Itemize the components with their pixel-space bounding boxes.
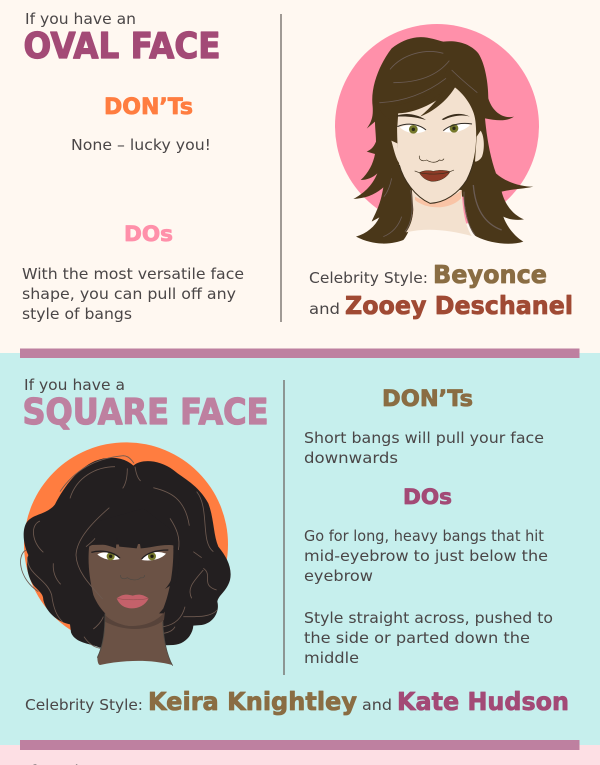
eyes	[97, 552, 166, 560]
eyebrows	[397, 114, 470, 120]
face	[89, 543, 173, 626]
oval celebrity style: Beyonce	[433, 260, 547, 289]
panel: square face	[21, 376, 569, 716]
bangs	[87, 508, 178, 550]
nose	[121, 575, 145, 580]
square celebrity style: Kate Hudson	[397, 687, 569, 716]
square dos heading: DOs	[403, 485, 452, 509]
lips	[419, 170, 450, 181]
oval dos text: shape, you can pull off any	[22, 285, 236, 303]
square dos text: the side or parted down the	[304, 629, 530, 647]
oval dos text: With the most versatile face	[22, 265, 244, 283]
icon: oval face woman portrait	[335, 24, 539, 244]
square celebrity style: Keira Knightley	[148, 687, 357, 716]
oval donts text: None – lucky you!	[71, 136, 211, 154]
square donts heading: DON’Ts	[382, 387, 473, 412]
panel: oval face	[22, 10, 573, 323]
oval donts heading: DON’Ts	[104, 95, 193, 120]
hair highlights	[21, 456, 217, 666]
square dos text: Go for long, heavy bangs that hit	[304, 527, 544, 545]
square dos text	[304, 527, 553, 667]
square celebrity style	[25, 687, 569, 716]
square celebrity style: and	[362, 696, 392, 714]
face	[397, 87, 476, 203]
square celebrity style: Celebrity Style:	[25, 696, 143, 714]
ears	[391, 131, 484, 164]
square intro text: If you have a	[24, 376, 125, 394]
square face heading: SQUARE FACE	[22, 392, 268, 433]
square dos text: middle	[304, 649, 359, 667]
icon: square face woman portrait	[21, 442, 231, 666]
lips	[117, 595, 149, 608]
oval celebrity style: Zooey Deschanel	[345, 291, 573, 320]
neck	[406, 187, 472, 236]
oval celebrity style	[309, 260, 573, 320]
square dos text: eyebrow	[304, 567, 373, 585]
nose	[419, 156, 444, 162]
oval face heading: OVAL FACE	[24, 26, 220, 67]
square donts text	[304, 429, 544, 467]
front bangs	[373, 63, 455, 127]
hair silhouette	[24, 458, 231, 648]
hair silhouette	[353, 37, 533, 244]
oval dos text	[22, 265, 244, 323]
oval dos heading: DOs	[124, 222, 173, 246]
oval dos text: style of bangs	[22, 305, 132, 323]
eyes	[400, 124, 470, 133]
neck	[97, 613, 172, 665]
square dos text: mid-eyebrow to just below the	[304, 547, 548, 565]
oval celebrity style: Celebrity Style:	[309, 269, 428, 287]
square donts text: downwards	[304, 449, 398, 467]
oval intro text: If you have an	[25, 10, 136, 28]
square dos text: Style straight across, pushed to	[304, 609, 553, 627]
square donts text: Short bangs will pull your face	[304, 429, 544, 447]
oval celebrity style: and	[309, 300, 340, 318]
hair highlights	[379, 51, 502, 237]
